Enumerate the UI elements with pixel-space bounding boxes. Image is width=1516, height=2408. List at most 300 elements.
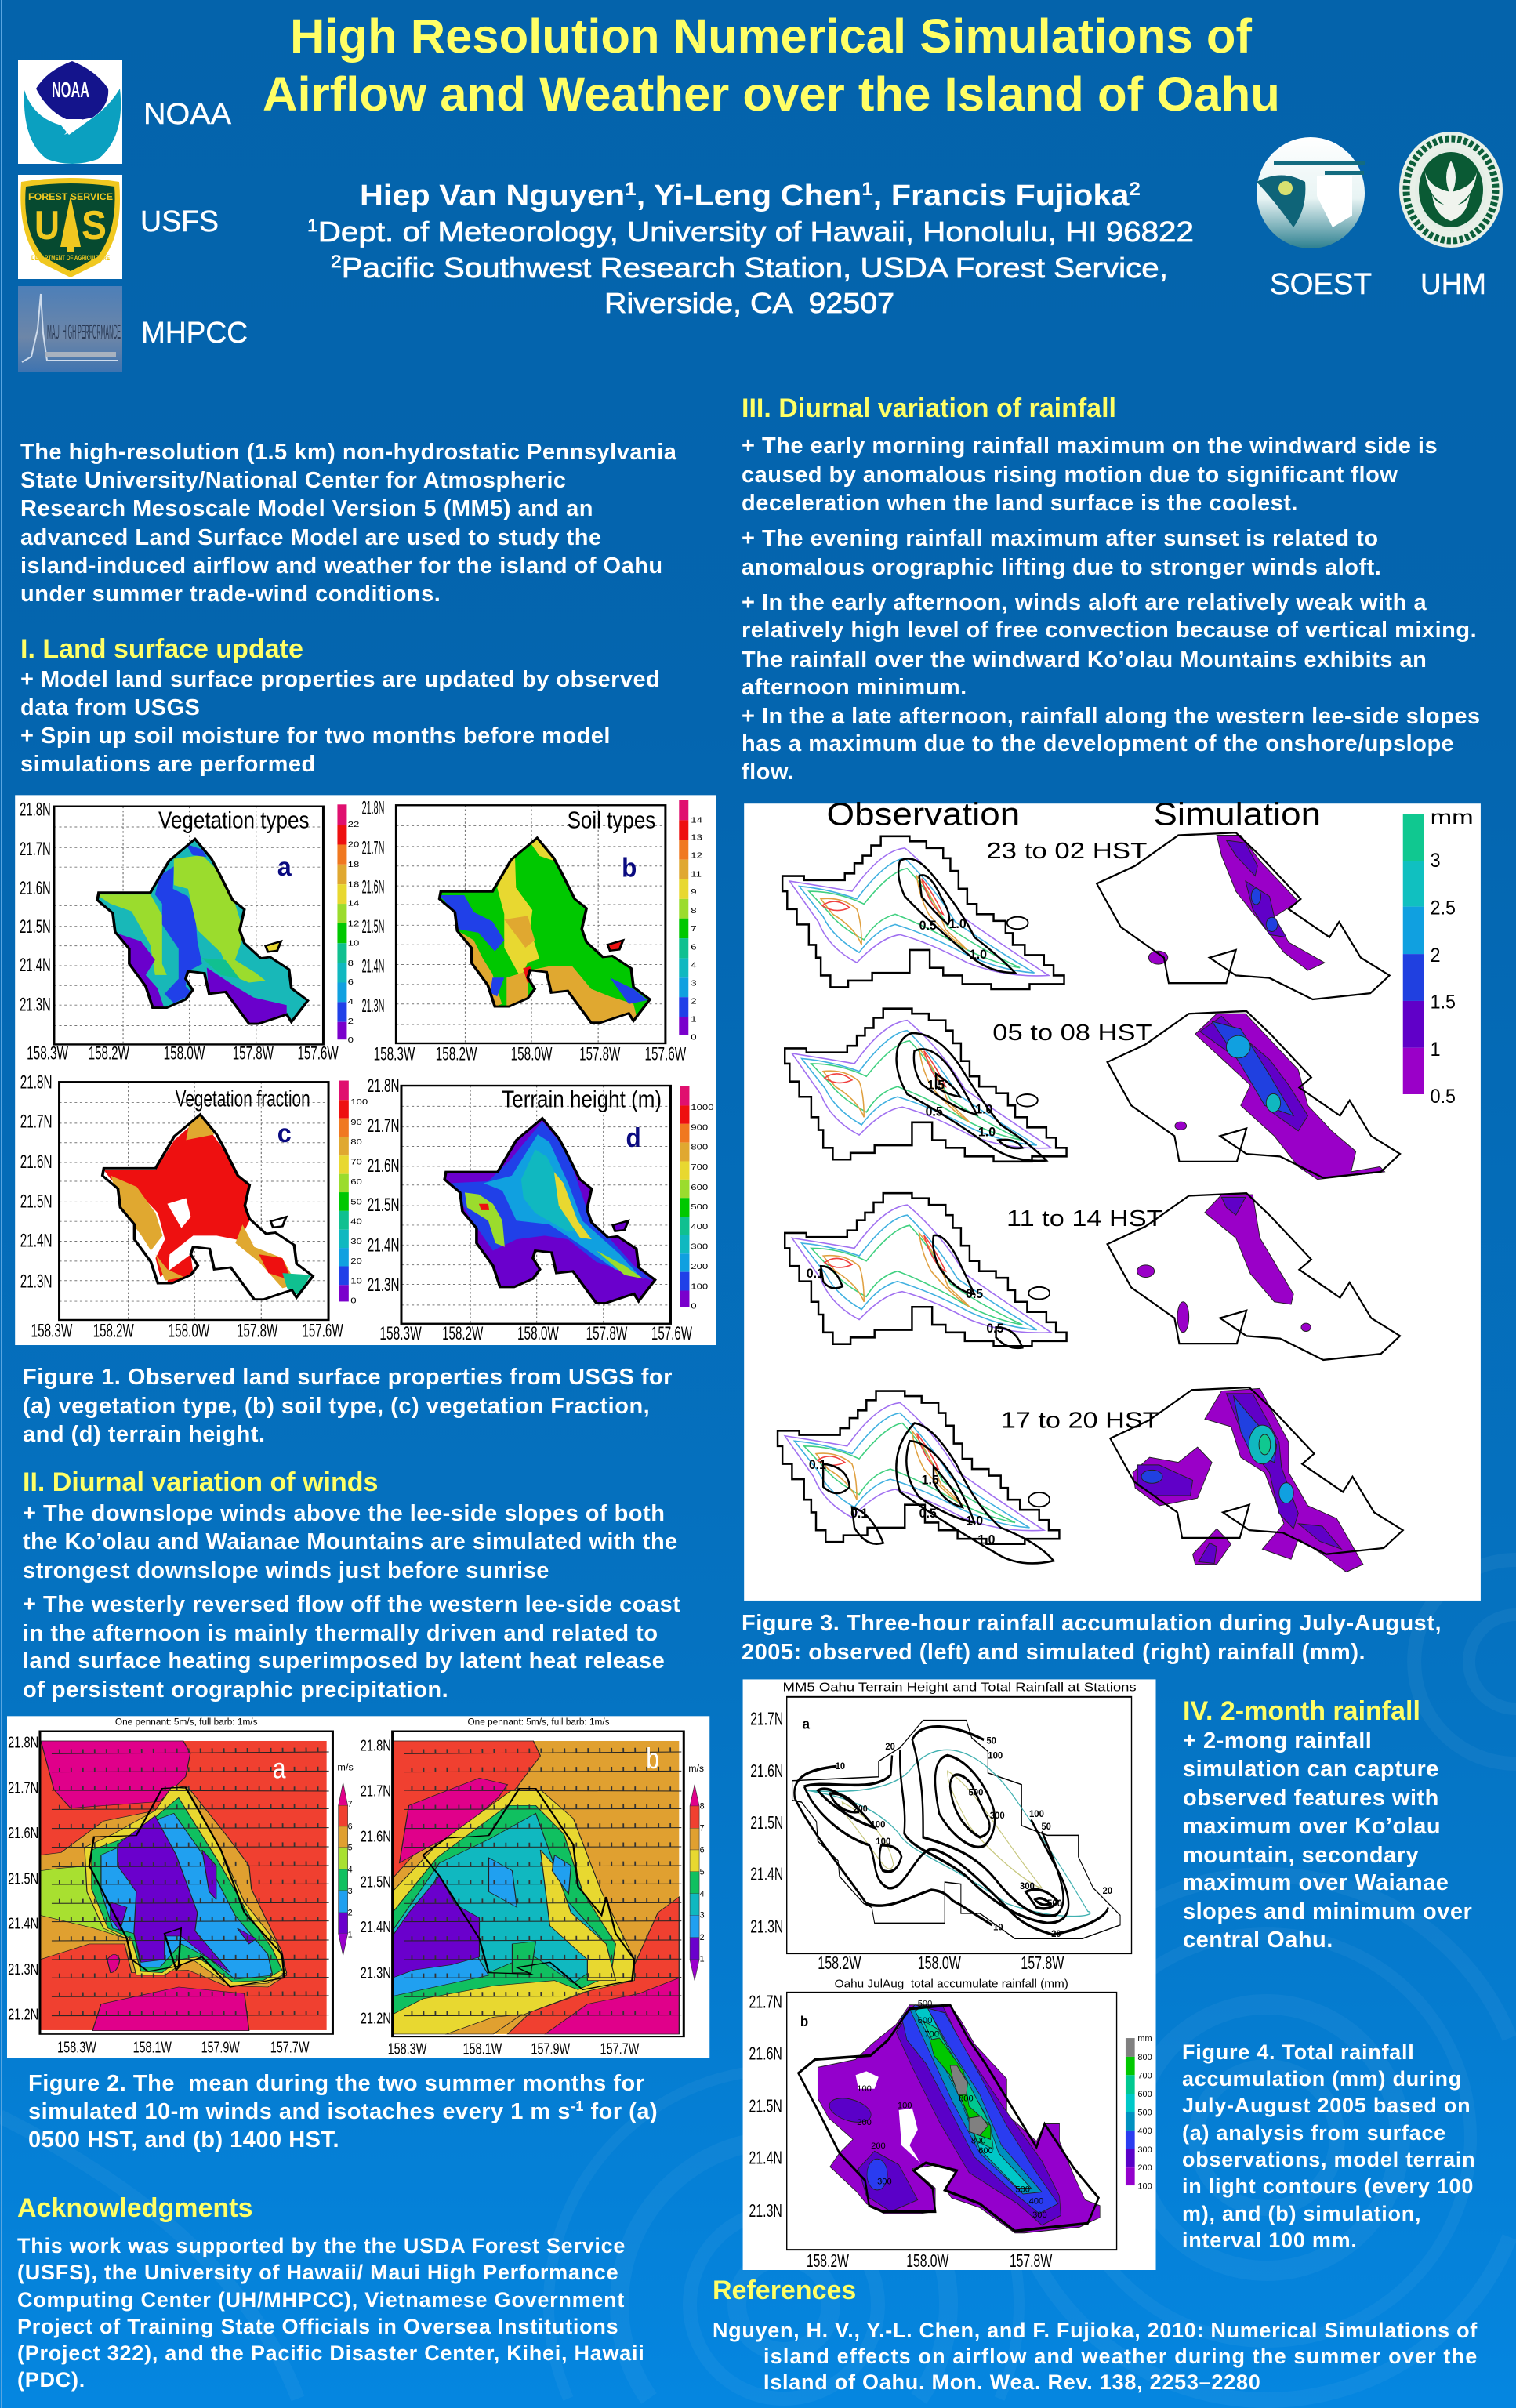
figure 1 labels: 157.8W: [233, 1043, 274, 1064]
figure 1 labels: 157.8W: [586, 1322, 628, 1344]
authors and affiliations: 1: [307, 216, 318, 235]
figure 2 labels: [8, 1717, 705, 2058]
logo: USFS: [18, 175, 122, 279]
map a labels: 300: [990, 1811, 1005, 1821]
figure 1 colorbar values: 0: [350, 1296, 357, 1305]
figure 2 caption: for (a): [584, 2099, 658, 2124]
figure 2 labels: 21.4N: [8, 1915, 38, 1932]
text: land surface bullets: + Model land surface properties are updated by observed: [20, 667, 660, 692]
figure 2 labels: a: [273, 1753, 286, 1785]
map b labels: Oahu JulAug total accumulate rainfall (mm): [835, 1976, 1068, 1990]
figure 1 labels: 157.8W: [237, 1319, 278, 1341]
map b labels: 500: [918, 1998, 932, 2008]
figure 1 labels: 157.6W: [297, 1043, 339, 1064]
figure 1 labels: Vegetation fraction: [176, 1086, 310, 1112]
figure 3 colorbar: mm: [1431, 807, 1474, 829]
figure 2 caption: Figure 2. The mean during the two summer months for: [28, 2071, 645, 2096]
text: 2-month rainfall bullets: maximum over Ko’olau: [1183, 1814, 1441, 1839]
figure 2 labels: 3: [700, 1911, 705, 1920]
heading: IV. 2-month rainfall: IV. 2-month rainfall: [1183, 1696, 1420, 1726]
figure 2 labels: 21.7N: [361, 1782, 391, 1800]
observation map 11-14: [785, 1193, 1067, 1348]
figure 1 colorbar values: 400: [691, 1222, 709, 1231]
heading: I. Land surface update: I. Land surface update: [20, 634, 303, 664]
intro text: [20, 440, 677, 607]
text: rainfall bullets: + In the a late afternoon, rainfall along the western lee-side slopes: [742, 704, 1481, 729]
figure 1 panel: [15, 795, 716, 1345]
figure 1 colorbar values: 2: [691, 996, 697, 1006]
figure 2 labels: 21.4N: [361, 1918, 391, 1936]
figure 3 colorbar: 1.5: [1431, 992, 1456, 1014]
figure 1 colorbar values: 500: [691, 1202, 709, 1212]
figure 4 caption: [1182, 2040, 1475, 2252]
map a: vegetation types: [54, 804, 346, 1044]
figure 1 colorbar values: 10: [350, 1276, 362, 1286]
figure 4 colorbar: 300: [1137, 2144, 1152, 2154]
figure 1 labels: 21.6N: [20, 877, 51, 898]
map c: vegetation fraction: [60, 1081, 349, 1320]
map a labels: 10: [993, 1923, 1003, 1933]
text: land surface bullets: data from USGS: [20, 695, 200, 720]
map b labels: 158.2W: [807, 2251, 849, 2272]
text: acknowledgments: [17, 2234, 645, 2392]
map a labels: 500: [968, 1788, 984, 1798]
observation map 17-20: 1.0: [977, 1532, 995, 1547]
figure 2 labels: One pennant: 5m/s, full barb: 1m/s: [468, 1717, 610, 1727]
figure 1 labels: 157.6W: [645, 1043, 686, 1064]
label: MHPCC: MHPCC: [141, 317, 248, 350]
figure 1 colorbar values: 6: [348, 977, 354, 987]
figure 2 labels: 1: [348, 1931, 353, 1939]
figure 1 colorbar values: 100: [350, 1097, 368, 1107]
figure 1 colorbar values: 3: [691, 978, 697, 988]
simulation map 11-14: [1108, 1193, 1400, 1360]
header labels: Observation: [826, 798, 1020, 832]
text: rainfall bullets: caused by anomalous rising motion due to significant flow: [742, 462, 1398, 488]
heading: III. Diurnal variation of rainfall: III. Diurnal variation of rainfall: [742, 393, 1116, 423]
text: rainfall bullets: [742, 433, 1481, 785]
island outline b: [423, 1789, 634, 1989]
figure 2 labels: 4: [348, 1865, 353, 1874]
map b labels: 157.8W: [1010, 2251, 1053, 2272]
label: USFS: USFS: [140, 205, 219, 238]
authors and affiliations: Pacific Southwest Research Station, USDA Forest Service,: [342, 252, 1168, 284]
figure 4 colorbar: 100: [1137, 2181, 1152, 2191]
figure 2 labels: 7: [700, 1823, 705, 1833]
figure 1 labels: 21.6N: [368, 1155, 400, 1176]
text: winds bullets: [23, 1501, 680, 1703]
figure 1 labels: 158.2W: [89, 1043, 129, 1064]
header labels: Simulation: [1153, 798, 1321, 832]
logo: UHM: [1399, 132, 1503, 248]
text: 2-month rainfall bullets: central Oahu.: [1183, 1927, 1333, 1953]
figure 1 colorbar values: 14: [691, 815, 702, 825]
figure 1 colorbar values: 1: [691, 1014, 697, 1024]
figure 1 labels: [20, 796, 692, 1344]
observation map 11-14: 0.1: [807, 1267, 824, 1281]
figure 3 colorbar: 2: [1431, 945, 1441, 966]
text: 2-month rainfall bullets: observed features with: [1183, 1786, 1439, 1811]
figure 2 labels: m/s: [688, 1763, 704, 1774]
authors and affiliations: Riverside, CA 92507: [604, 287, 894, 319]
observation map 17-20: 0.1: [809, 1458, 826, 1472]
wind map b: [393, 1741, 679, 2034]
figure 2 labels: 158.3W: [388, 2040, 427, 2058]
figure 4 colorbar: 600: [1137, 2089, 1152, 2098]
figure 1 labels: 21.8N: [20, 1071, 53, 1093]
figure 1 labels: 158.0W: [517, 1322, 559, 1344]
map a labels: 21.5N: [750, 1813, 783, 1833]
figure 4 colorbar: 400: [1137, 2125, 1152, 2135]
text: 2-month rainfall bullets: slopes and minimum over: [1183, 1899, 1472, 1924]
figure 4 caption: (a) analysis from surface: [1182, 2121, 1446, 2145]
figure 1 labels: 21.5N: [20, 1190, 53, 1212]
map b labels: 500: [1015, 2184, 1030, 2194]
authors and affiliations: 1: [861, 179, 873, 200]
map a labels: 20: [1103, 1887, 1112, 1896]
figure 1 labels: 158.3W: [27, 1043, 68, 1064]
text: rainfall bullets: flow.: [742, 760, 794, 785]
figure 1 labels: c: [277, 1119, 292, 1148]
figure 1 colorbar values: 50: [350, 1197, 362, 1206]
authors and affiliations: 2: [331, 252, 342, 271]
figure 2 caption: [28, 2071, 658, 2152]
figure 1 colorbar values: 12: [691, 850, 702, 860]
text: 2-month rainfall bullets: simulation can capture: [1183, 1757, 1439, 1782]
observation map 17-20: 1.5: [922, 1473, 939, 1488]
wind map a: [40, 1741, 327, 2031]
map b labels: [749, 1976, 1068, 2272]
observation map 17-20: 0.1: [850, 1506, 868, 1521]
figure 4 caption: m), and (b) simulation,: [1182, 2202, 1421, 2225]
figure 1 labels: 21.3N: [362, 995, 384, 1016]
logo: USFS: U: [34, 203, 60, 248]
figure 4 caption: interval 100 mm.: [1182, 2228, 1358, 2252]
figure 1 labels: 21.5N: [362, 916, 384, 937]
map b: simulated rainfall: [787, 1993, 1117, 2250]
figure 1 caption: and (d) terrain height.: [23, 1422, 266, 1447]
text: 2-month rainfall bullets: maximum over Waianae: [1183, 1870, 1449, 1895]
figure 1 labels: 21.5N: [20, 916, 51, 937]
observation map 05-08: 0.5: [926, 1104, 943, 1119]
observation map 11-14: 0.5: [966, 1287, 983, 1301]
label: UHM: UHM: [1420, 268, 1486, 301]
figure 1 colorbar values: 4: [691, 960, 697, 970]
text: winds bullets: of persistent orographic precipitation.: [23, 1677, 448, 1703]
simulation map 23-02: [1097, 832, 1390, 999]
figure 1 labels: 21.3N: [20, 1270, 53, 1292]
authors and affiliations: 2: [1129, 179, 1141, 200]
map a labels: 157.8W: [1021, 1953, 1064, 1974]
figure 2 labels: 21.5N: [8, 1869, 38, 1888]
intro text: advanced Land Surface Model are used to study the: [20, 525, 602, 550]
text: winds bullets: land surface heating superimposed by latent heat release: [23, 1648, 665, 1674]
authors and affiliations: Dept. of Meteorology, University of Hawaii, Honolulu, HI 96822: [318, 216, 1194, 248]
figure 2 caption: 0500 HST, and (b) 1400 HST.: [28, 2127, 339, 2152]
figure 4 colorbar: 700: [1137, 2070, 1152, 2080]
authors and affiliations: Hiep Van Nguyen: [360, 180, 603, 212]
figure 1 labels: 21.8N: [362, 796, 384, 818]
figure 1 colorbar values: 14: [348, 898, 360, 908]
map a labels: 21.4N: [750, 1865, 783, 1884]
text: land surface bullets: + Spin up soil moisture for two months before model: [20, 723, 611, 749]
wind barbs b: [404, 1750, 681, 2016]
figure 1 labels: 158.3W: [31, 1319, 73, 1341]
map b labels: 158.0W: [906, 2251, 949, 2272]
text: rainfall bullets: relatively high level of free convection because of vertical mixing.: [742, 618, 1477, 643]
text: reference citation: island effects on airflow and weather during the summer over the: [763, 2345, 1478, 2368]
figure 2 labels: 157.9W: [201, 2038, 240, 2056]
figure 1 colorbar values: 8: [348, 958, 354, 968]
text: acknowledgments: Project of Training State Officials in Oversea Institutions: [17, 2315, 618, 2338]
figure 3 colorbar: 1: [1431, 1039, 1441, 1061]
background ripple rings: [0, 1560, 1516, 2400]
figure 2 labels: 21.8N: [8, 1733, 38, 1751]
figure 1 colorbar values: [348, 815, 714, 1311]
figure 1 colorbar values: 900: [691, 1122, 709, 1132]
figure 1 colorbar values: 30: [350, 1236, 362, 1246]
figure 2 labels: 21.2N: [361, 2010, 391, 2027]
observation map 17-20: [778, 1391, 1059, 1563]
figure 2 labels: 21.5N: [361, 1873, 391, 1891]
figure 4 caption: accumulation (mm) during: [1182, 2067, 1462, 2091]
figure 1 colorbar values: 22: [348, 819, 360, 829]
map a labels: 50: [1041, 1822, 1051, 1832]
text: reference citation: Island of Oahu. Mon. Wea. Rev. 138, 2253–2280: [763, 2370, 1260, 2394]
figure 1 labels: 21.7N: [20, 838, 51, 859]
text: rainfall bullets: afternoon minimum.: [742, 675, 967, 700]
map a labels: 300: [1020, 1882, 1035, 1892]
map b labels: 100: [898, 2100, 912, 2110]
figure 1 labels: 21.7N: [20, 1111, 53, 1132]
observation map 05-08: 1.5: [927, 1078, 945, 1093]
figure 4 caption: in light contours (every 100: [1182, 2174, 1474, 2198]
figure 1 caption: (a) vegetation type, (b) soil type, (c) vegetation Fraction,: [23, 1394, 650, 1419]
text: winds bullets: + The downslope winds above the lee-side slopes of both: [23, 1501, 665, 1526]
figure 1 labels: 157.6W: [651, 1322, 692, 1344]
figure 2 labels: 2: [700, 1933, 705, 1942]
text: acknowledgments: Computing Center (UH/MHPCC), Vietnamese Government: [17, 2288, 625, 2312]
intro text: The high-resolution (1.5 km) non-hydrostatic Pennsylvania: [20, 440, 677, 465]
map a labels: 158.2W: [818, 1953, 861, 1974]
title: High Resolution Numerical Simulations of: [290, 9, 1253, 63]
figure 1 labels: 21.6N: [20, 1151, 53, 1173]
figure 1 labels: 158.3W: [374, 1043, 415, 1064]
figure 1 labels: 21.4N: [362, 956, 384, 977]
figure 2 labels: 21.2N: [8, 2006, 38, 2023]
figure 1 colorbar values: 700: [691, 1162, 709, 1172]
figure 2 labels: 157.7W: [600, 2040, 640, 2058]
text: winds bullets: the Ko’olau and Waianae Mountains are simulated with the: [23, 1529, 678, 1554]
figure 1 colorbar values: 60: [350, 1177, 362, 1186]
time labels: 05 to 08 HST: [992, 1020, 1152, 1045]
logo: USFS: FOREST SERVICE: [28, 191, 113, 202]
intro text: island-induced airflow and weather for the island of Oahu: [20, 553, 663, 578]
figure 1 caption: [23, 1365, 673, 1447]
text: winds bullets: in the afternoon is mainly thermally driven and related to: [23, 1621, 658, 1646]
map a labels: 10: [836, 1762, 845, 1772]
logo: SOEST: [1257, 137, 1365, 248]
figure 1 colorbar values: 11: [691, 869, 702, 879]
figure 3 colorbar: 2.5: [1431, 898, 1456, 919]
map a labels: 158.0W: [918, 1953, 961, 1974]
time labels: 11 to 14 HST: [1006, 1206, 1163, 1231]
figure 2 labels: 1: [700, 1955, 705, 1964]
text: rainfall bullets: + In the early afternoon, winds aloft are relatively weak with a: [742, 590, 1427, 615]
figure 2 labels: 158.1W: [463, 2040, 502, 2058]
map a labels: 20: [885, 1743, 895, 1752]
poster: MAUI HIGH PERFORMANCE: [47, 320, 121, 343]
colorbar a: [339, 1782, 348, 1956]
map b labels: 600: [918, 2015, 932, 2025]
figure 2 caption: -1: [571, 2098, 584, 2114]
observation map 17-20: 1.0: [966, 1514, 983, 1529]
figure 1 colorbar values: 300: [691, 1242, 709, 1251]
figure 2 labels: 2: [348, 1908, 353, 1917]
figure 1 labels: 21.8N: [20, 799, 51, 820]
figure 1 colorbar values: 100: [691, 1282, 709, 1291]
figure 1 colorbar values: 600: [691, 1182, 709, 1192]
text: 2-month rainfall bullets: mountain, secondary: [1183, 1843, 1419, 1868]
observation map 23-02: 1.0: [970, 948, 987, 962]
figure 2 labels: 21.6N: [8, 1824, 38, 1842]
map a labels: 200: [854, 1804, 868, 1815]
figure 2 labels: 158.3W: [57, 2038, 96, 2056]
figure 1 colorbar values: 80: [350, 1137, 362, 1147]
text: reference citation: [713, 2319, 1478, 2394]
figure 1 labels: a: [277, 853, 292, 882]
text: rainfall bullets: anomalous orographic lifting due to stronger winds aloft.: [742, 555, 1381, 580]
map b labels: 300: [877, 2176, 892, 2186]
map b labels: 200: [857, 2116, 872, 2127]
figure 4 colorbar: 500: [1137, 2107, 1152, 2117]
authors and affiliations: , Francis Fujioka: [873, 180, 1130, 212]
authors and affiliations: 1: [625, 179, 637, 200]
figure 1 colorbar values: 6: [691, 942, 697, 952]
text: rainfall bullets: + The evening rainfall maximum after sunset is related to: [742, 526, 1379, 551]
figure 1 labels: Soil types: [568, 807, 655, 833]
map b labels: 600: [978, 2145, 993, 2155]
figure 4 colorbar: 800: [1137, 2051, 1152, 2062]
figure 2 caption: simulated 10-m winds and isotaches every 1 m s: [28, 2099, 571, 2124]
text: 2-month rainfall bullets: + 2-mong rainfall: [1183, 1728, 1372, 1753]
figure 1 labels: 157.8W: [579, 1043, 621, 1064]
heading: References: References: [713, 2276, 856, 2305]
map d: terrain height: [401, 1086, 689, 1324]
figure 1 caption: Figure 1. Observed land surface properties from USGS for: [23, 1365, 673, 1390]
figure 1 colorbar values: 800: [691, 1142, 709, 1151]
map b: soil types: [396, 800, 688, 1043]
time labels: 23 to 02 HST: [986, 838, 1147, 863]
figure 1 labels: 158.3W: [379, 1322, 422, 1344]
figure 3 colorbar: 3: [1431, 850, 1441, 872]
figure 2 labels: b: [646, 1743, 659, 1775]
figure 2 labels: 4: [700, 1889, 705, 1898]
figure 2 labels: 157.7W: [270, 2038, 310, 2056]
logo: USFS: DEPARTMENT OF AGRICULTURE: [31, 254, 110, 262]
figure 3 panel: [744, 798, 1481, 1601]
figure 1 colorbar values: 40: [350, 1217, 362, 1226]
figure 1 colorbar values: 7: [691, 923, 697, 934]
figure 2 labels: 21.3N: [8, 1960, 38, 1978]
figure 1 labels: b: [622, 854, 637, 883]
map a labels: a: [802, 1716, 811, 1732]
figure 1 labels: 157.6W: [302, 1319, 343, 1341]
map b labels: 21.7N: [749, 1993, 782, 2013]
map a labels: 21.6N: [750, 1761, 783, 1782]
map a labels: 100: [988, 1751, 1003, 1761]
map b labels: 21.6N: [749, 2044, 782, 2064]
figure 1 labels: 158.2W: [93, 1319, 134, 1341]
map b labels: 21.5N: [749, 2097, 782, 2116]
figure 2 labels: 157.9W: [531, 2040, 570, 2058]
figure 2 labels: m/s: [337, 1761, 354, 1772]
text: 2-month rainfall bullets: [1183, 1728, 1472, 1953]
figure 1 labels: 21.4N: [20, 954, 51, 975]
figure 1 colorbar values: 0: [691, 1032, 697, 1042]
figure 1 colorbar values: 200: [691, 1261, 709, 1271]
map b labels: 21.4N: [749, 2149, 782, 2169]
map a labels: 50: [987, 1736, 996, 1746]
text: winds bullets: strongest downslope winds just before sunrise: [23, 1558, 549, 1583]
figure 1 labels: 21.3N: [20, 993, 51, 1015]
wind barbs a: [52, 1750, 329, 2016]
figure 4 caption: Figure 4. Total rainfall: [1182, 2040, 1415, 2064]
map b labels: 100: [857, 2083, 872, 2094]
text: acknowledgments: This work was supported by the the USDA Forest Service: [17, 2234, 626, 2258]
label: NOAA: NOAA: [143, 98, 232, 131]
text: land surface bullets: simulations are performed: [20, 752, 316, 777]
figure 2 labels: One pennant: 5m/s, full barb: 1m/s: [115, 1717, 258, 1727]
intro text: under summer trade-wind conditions.: [20, 582, 441, 607]
figure 2 labels: 21.8N: [361, 1736, 391, 1754]
heading: Acknowledgments: Acknowledgments: [17, 2193, 252, 2223]
figure 2 labels: 6: [348, 1822, 353, 1831]
figure 4 colorbar: 200: [1137, 2163, 1152, 2172]
text: rainfall bullets: + The early morning rainfall maximum on the windward side is: [742, 433, 1438, 459]
map a labels: 21.7N: [750, 1710, 783, 1729]
map a labels: [750, 1680, 1137, 1974]
figure 1 labels: 158.2W: [436, 1043, 477, 1064]
map a labels: 20: [1051, 1930, 1061, 1940]
logo: NOAA: NOAA: [52, 78, 89, 102]
observation map 23-02: 0.5: [919, 918, 937, 933]
figure 1 labels: Terrain height (m): [502, 1086, 662, 1112]
colorbar b: [690, 1785, 699, 1981]
map a labels: 100: [1029, 1810, 1044, 1820]
observation map 11-14: 0.5: [986, 1321, 1003, 1336]
authors and affiliations: [307, 179, 1194, 319]
map b labels: b: [800, 2014, 808, 2030]
figure 1 colorbar values: 1000: [691, 1102, 714, 1112]
figure 1 labels: 158.0W: [169, 1319, 210, 1341]
figure 1 labels: 158.0W: [511, 1043, 553, 1064]
observation map 05-08: 1.0: [978, 1125, 996, 1139]
figure 2 labels: 3: [348, 1887, 353, 1896]
figure 1 colorbar values: 4: [348, 997, 354, 1006]
figure 3 caption: 2005: observed (left) and simulated (right) rainfall (mm).: [742, 1640, 1365, 1665]
figure 3 colorbar: [1403, 807, 1474, 1108]
map a labels: 100: [876, 1837, 891, 1847]
simulation map 17-20: [1110, 1387, 1403, 1572]
figure 2 labels: 6: [700, 1845, 705, 1855]
figure 1 colorbar values: 8: [691, 905, 697, 916]
figure 2 labels: 21.3N: [361, 1964, 391, 1982]
figure 4 colorbar: mm: [1137, 2033, 1152, 2043]
text: acknowledgments: (USFS), the University of Hawaii/ Maui High Performance: [17, 2261, 618, 2284]
logo: MHPCC: [18, 286, 122, 372]
figure 1 colorbar values: 18: [348, 879, 360, 889]
